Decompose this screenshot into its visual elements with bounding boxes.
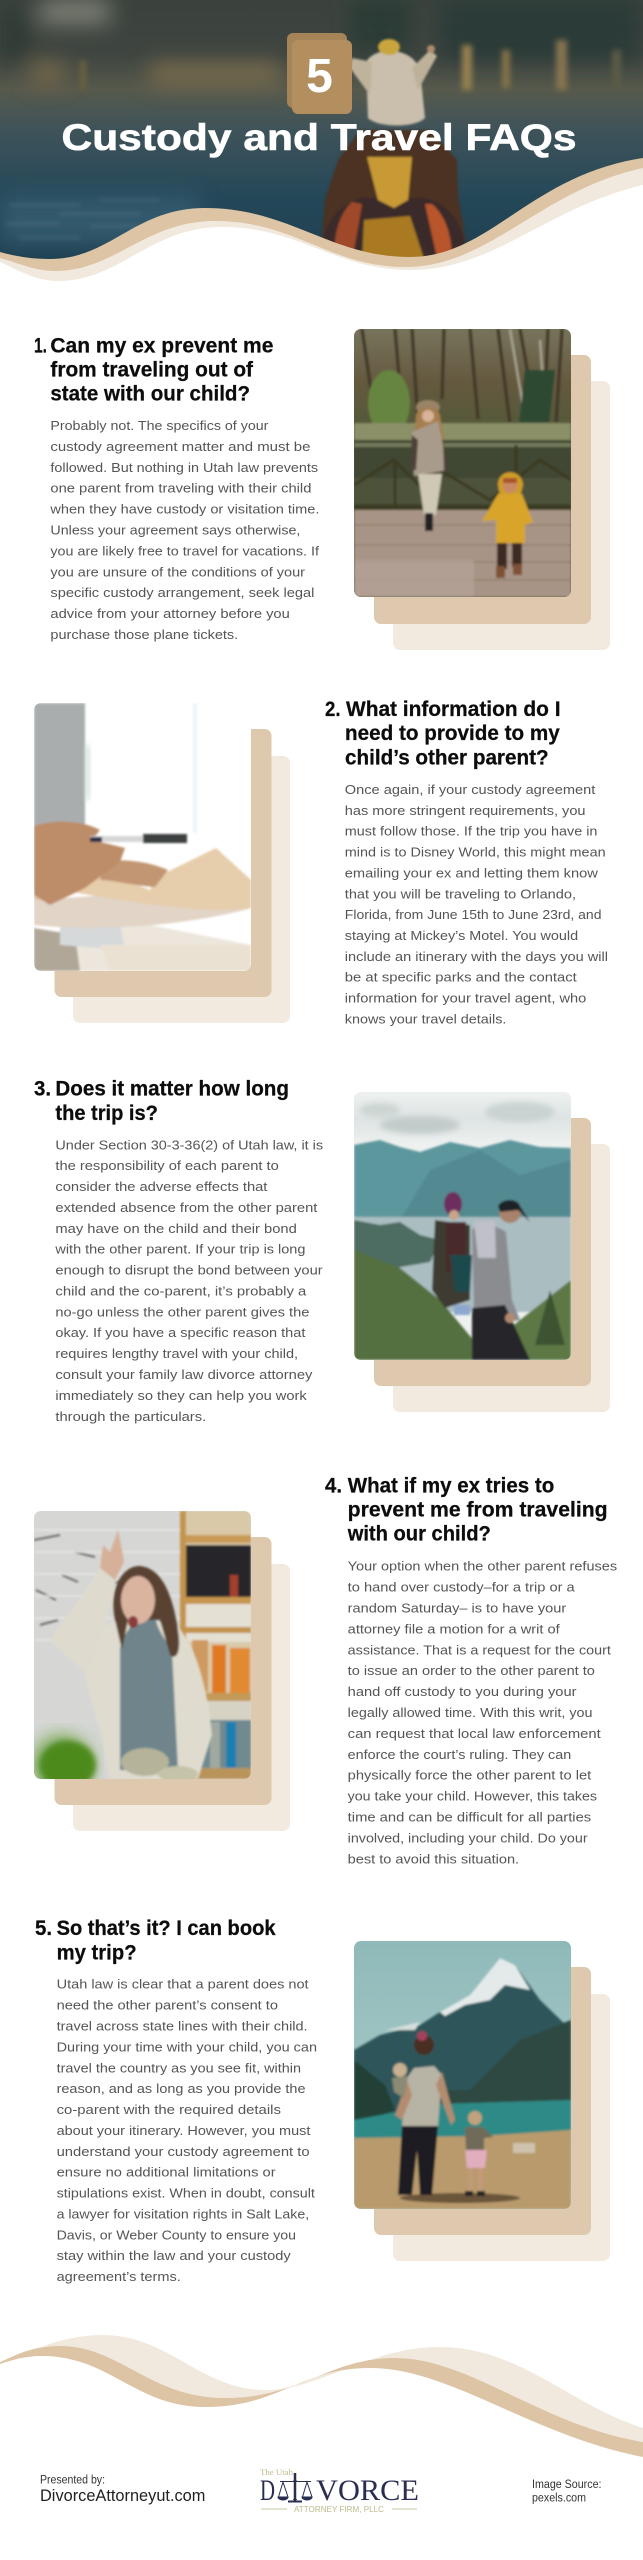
answer 5 text bbox=[57, 1977, 317, 2284]
question 4 heading: with our child? bbox=[347, 1523, 491, 1546]
answer 1 text: advice from your attorney before you bbox=[50, 606, 290, 621]
middle card bbox=[374, 1967, 591, 2235]
paper bbox=[60, 848, 251, 910]
answer 2 text: information for your travel agent, who bbox=[345, 990, 586, 1006]
answer 4 text: enforce the court’s ruling. They can bbox=[348, 1747, 571, 1762]
child bbox=[468, 2111, 482, 2125]
answer 5 text: reason, and as long as you provide the bbox=[57, 2081, 305, 2096]
back card bbox=[73, 756, 290, 1023]
baby bbox=[393, 2063, 407, 2077]
section 3 bbox=[34, 1078, 610, 1424]
answer 4 text: legally allowed time. With this writ, you bbox=[348, 1705, 592, 1720]
first hand bbox=[34, 822, 125, 905]
answer 2 text bbox=[345, 782, 608, 1026]
answer 2 text: has more stringent requirements, you bbox=[345, 803, 586, 818]
answer 4 text: assistance. That is a request for the court bbox=[348, 1642, 611, 1657]
section 2 bbox=[34, 698, 608, 1026]
header wave: white base bbox=[0, 185, 643, 302]
answer 2 text: must follow those. If the trip you have in bbox=[345, 824, 597, 839]
answer 1 text: followed. But nothing in Utah law prevents bbox=[50, 460, 319, 475]
answer 4 text: random Saturday– is to have your bbox=[348, 1600, 567, 1616]
answer 3 text: extended absence from the other parent bbox=[55, 1200, 318, 1215]
question 3 heading: the trip is? bbox=[55, 1102, 158, 1125]
answer 2 text: Once again, if your custody agreement bbox=[345, 782, 596, 797]
answer 1 text: Unless your agreement says otherwise, bbox=[50, 522, 300, 538]
answer 2 text: knows your travel details. bbox=[345, 1011, 506, 1026]
answer 1 text: you are unsure of the conditions of your bbox=[50, 564, 306, 579]
question 1 heading bbox=[34, 335, 273, 406]
answer 4 text: best to avoid this situation. bbox=[348, 1851, 519, 1866]
middle card bbox=[374, 355, 591, 624]
footer: image source bbox=[532, 2479, 602, 2505]
middle card bbox=[54, 729, 272, 997]
section 4 bbox=[34, 1475, 618, 1866]
mother bbox=[414, 2035, 434, 2055]
second hand bbox=[100, 860, 168, 887]
answer 5 text: stipulations exist. When in doubt, consult bbox=[57, 2186, 315, 2200]
answer 4 text: time and can be difficult for all parties bbox=[348, 1810, 592, 1824]
answer 5 text: travel across state lines with their child. bbox=[57, 2018, 308, 2034]
answer 4 text: to issue an order to the other parent to bbox=[348, 1663, 595, 1678]
answer 5 text: ensure no additional limitations or bbox=[57, 2165, 276, 2180]
answer 1 text: you are likely free to travel for vacations. If bbox=[50, 543, 319, 558]
answer 5 text: about your itinerary. However, you must bbox=[57, 2123, 311, 2138]
carrier and child bbox=[432, 1220, 470, 1308]
answer 1 text: specific custody arrangement, seek legal bbox=[50, 585, 314, 600]
sweater bbox=[120, 1618, 178, 1770]
back card bbox=[73, 1564, 290, 1831]
photo: father hiking with child in carrier bbox=[354, 1092, 571, 1360]
answer 3 text: requires lengthy travel with your child, bbox=[55, 1346, 298, 1361]
answer 3 text: immediately so they can help you work bbox=[55, 1388, 307, 1403]
question 2 heading: What information do I bbox=[346, 698, 560, 721]
answer 1 text: custody agreement matter and must be bbox=[50, 439, 310, 454]
photo: hands with pen and paper bbox=[34, 703, 251, 971]
section 1 bbox=[34, 329, 610, 650]
question 2 heading: child’s other parent? bbox=[345, 746, 549, 769]
answer 5 text: understand your custody agreement to bbox=[57, 2144, 310, 2159]
answer 5 text: agreement’s terms. bbox=[57, 2269, 181, 2284]
back card bbox=[393, 381, 610, 650]
answer 4 text: Your option when the other parent refuses bbox=[348, 1559, 618, 1574]
answer 4 text: you take your child. However, this takes bbox=[348, 1789, 597, 1804]
question 4 heading bbox=[325, 1475, 608, 1546]
raised hand bbox=[100, 1530, 124, 1580]
number badge bbox=[287, 33, 352, 114]
child coat bbox=[366, 51, 425, 126]
section 5 bbox=[35, 1917, 610, 2284]
answer 3 text: may have on the child and their bond bbox=[55, 1221, 297, 1236]
answer 1 text: when they have custody or visitation time. bbox=[49, 502, 319, 517]
question 4 heading: What if my ex tries to bbox=[348, 1475, 554, 1498]
middle card bbox=[54, 1537, 272, 1805]
answer 3 text: through the particulars. bbox=[55, 1409, 206, 1424]
answer 3 text: no-go unless the other parent gives the bbox=[55, 1304, 309, 1319]
footer: presented by: Presented by: bbox=[40, 2475, 105, 2487]
adult body bbox=[320, 128, 466, 244]
answer 4 text: involved, including your child. Do your bbox=[348, 1830, 588, 1845]
photo: mother with two children by a mountain lake bbox=[354, 1941, 571, 2209]
answer 5 text: travel the country as you see fit, within bbox=[57, 2060, 301, 2075]
woman bbox=[416, 400, 440, 414]
logo: The Utah Divorce Attorney Firm, PLLC bbox=[260, 2467, 419, 2514]
question 1 heading: state with our child? bbox=[50, 383, 250, 406]
question 3 heading bbox=[34, 1078, 289, 1125]
answer 2 text: emailing your ex and letting them know bbox=[345, 865, 598, 880]
answer 3 text: child and the co-parent, it’s probably a bbox=[55, 1283, 307, 1298]
title: Custody and Travel FAQs bbox=[62, 117, 576, 158]
answer 3 text: with the other parent. If your trip is long bbox=[54, 1242, 305, 1257]
question 5 heading bbox=[35, 1917, 276, 1964]
answer 3 text: enough to disrupt the bond between your bbox=[55, 1262, 323, 1278]
answer 3 text: the responsibility of each parent to bbox=[55, 1158, 279, 1173]
answer 3 text bbox=[54, 1137, 324, 1424]
number badge: 5 bbox=[306, 50, 333, 103]
answer 5 text: stay within the law and your custody bbox=[57, 2248, 291, 2263]
answer 2 text: include an itinerary with the days you will bbox=[345, 949, 608, 964]
footer wave bbox=[0, 2335, 643, 2457]
answer 5 text: Utah law is clear that a parent does not bbox=[57, 1977, 309, 1992]
answer 2 text: that you will be traveling to Orlando, bbox=[345, 886, 576, 901]
footer: presented by: DivorceAttorneyut.com bbox=[40, 2487, 205, 2505]
answer 2 text: be at specific parks and the contact bbox=[345, 970, 577, 985]
answer 5 text: Davis, or Weber County to ensure you bbox=[57, 2227, 296, 2242]
header wave: light layer bbox=[0, 168, 643, 300]
question 3 heading: Does it matter how long bbox=[55, 1078, 289, 1101]
answer 4 text bbox=[348, 1559, 618, 1866]
question 2 heading: 2. bbox=[325, 698, 340, 721]
back card bbox=[393, 1144, 610, 1412]
middle card bbox=[374, 1118, 591, 1386]
header panel bbox=[0, 0, 643, 302]
yellow backpack bbox=[367, 157, 412, 208]
photo: woman gesturing by a bookshelf bbox=[34, 1511, 251, 1791]
answer 5 text: During your time with your child, you can bbox=[57, 2039, 317, 2054]
question 4 heading: prevent me from traveling bbox=[348, 1499, 608, 1522]
cloth in hands bbox=[121, 1748, 169, 1776]
answer 5 text: need the other parent’s consent to bbox=[57, 1998, 278, 2013]
header wave: tan layer bbox=[0, 158, 643, 300]
cardigan bbox=[82, 1620, 212, 1779]
question 1 heading: Can my ex prevent me bbox=[50, 335, 273, 358]
answer 4 text: can request that local law enforcement bbox=[348, 1726, 601, 1741]
logo: The Utah Divorce Attorney Firm, PLLC: ATTORNEY FIRM, PLLC bbox=[294, 2504, 384, 2514]
answer 1 text: purchase those plane tickets. bbox=[50, 627, 238, 642]
answer 5 text: a lawyer for visitation rights in Salt Lake, bbox=[57, 2206, 309, 2221]
logo: The Utah Divorce Attorney Firm, PLLC: VORCE bbox=[316, 2474, 419, 2507]
back card bbox=[393, 1994, 610, 2261]
logo: The Utah Divorce Attorney Firm, PLLC: I bbox=[292, 2474, 298, 2507]
answer 2 text: staying at Mickey’s Motel. You would bbox=[345, 928, 578, 943]
answer 3 text: consult your family law divorce attorney bbox=[55, 1367, 313, 1382]
answer 1 text: one parent from traveling with their child bbox=[50, 481, 311, 496]
question 1 heading: 1. bbox=[34, 335, 47, 358]
answer 3 text: Under Section 30-3-36(2) of Utah law, it is bbox=[55, 1137, 324, 1152]
answer 1 text bbox=[49, 418, 319, 642]
pen bbox=[90, 836, 145, 842]
logo: The Utah Divorce Attorney Firm, PLLC: The Utah bbox=[260, 2467, 294, 2477]
answer 4 text: physically force the other parent to let bbox=[348, 1768, 592, 1783]
question 5 heading: my trip? bbox=[57, 1941, 137, 1964]
footer: image source: pexels.com bbox=[532, 2493, 586, 2505]
question 2 heading bbox=[325, 698, 560, 769]
question 1 heading: from traveling out of bbox=[50, 359, 254, 382]
header photo: parent carrying child by a lake bbox=[0, 0, 643, 259]
face bbox=[121, 1576, 155, 1624]
question 4 heading: 4. bbox=[325, 1475, 342, 1498]
child bbox=[498, 472, 523, 497]
footer: presented by bbox=[40, 2475, 205, 2505]
hair bbox=[113, 1566, 179, 1657]
question 2 heading: need to provide to my bbox=[345, 722, 560, 745]
question 3 heading: 3. bbox=[34, 1078, 51, 1101]
photo: mother and child on a wooden deck bbox=[354, 329, 571, 597]
man bbox=[472, 1225, 520, 1322]
answer 5 text: co-parent with the required details bbox=[57, 2102, 281, 2117]
answer 4 text: to hand over custody–for a trip or a bbox=[348, 1580, 575, 1595]
logo: The Utah Divorce Attorney Firm, PLLC: D bbox=[260, 2474, 275, 2507]
question 5 heading: 5. bbox=[35, 1917, 52, 1940]
answer 2 text: Florida, from June 15th to June 23rd, and bbox=[345, 907, 602, 922]
answer 3 text: consider the adverse effects that bbox=[55, 1179, 268, 1194]
answer 2 text: mind is to Disney World, this might mean bbox=[345, 845, 606, 860]
footer: image source: Image Source: bbox=[532, 2479, 602, 2491]
answer 3 text: okay. If you have a specific reason that bbox=[55, 1325, 306, 1340]
question 5 heading: So that’s it? I can book bbox=[57, 1917, 276, 1940]
answer 1 text: Probably not. The specifics of your bbox=[50, 418, 269, 433]
answer 4 text: hand off custody to you during your bbox=[348, 1684, 577, 1699]
answer 4 text: attorney file a motion for a writ of bbox=[348, 1621, 560, 1636]
